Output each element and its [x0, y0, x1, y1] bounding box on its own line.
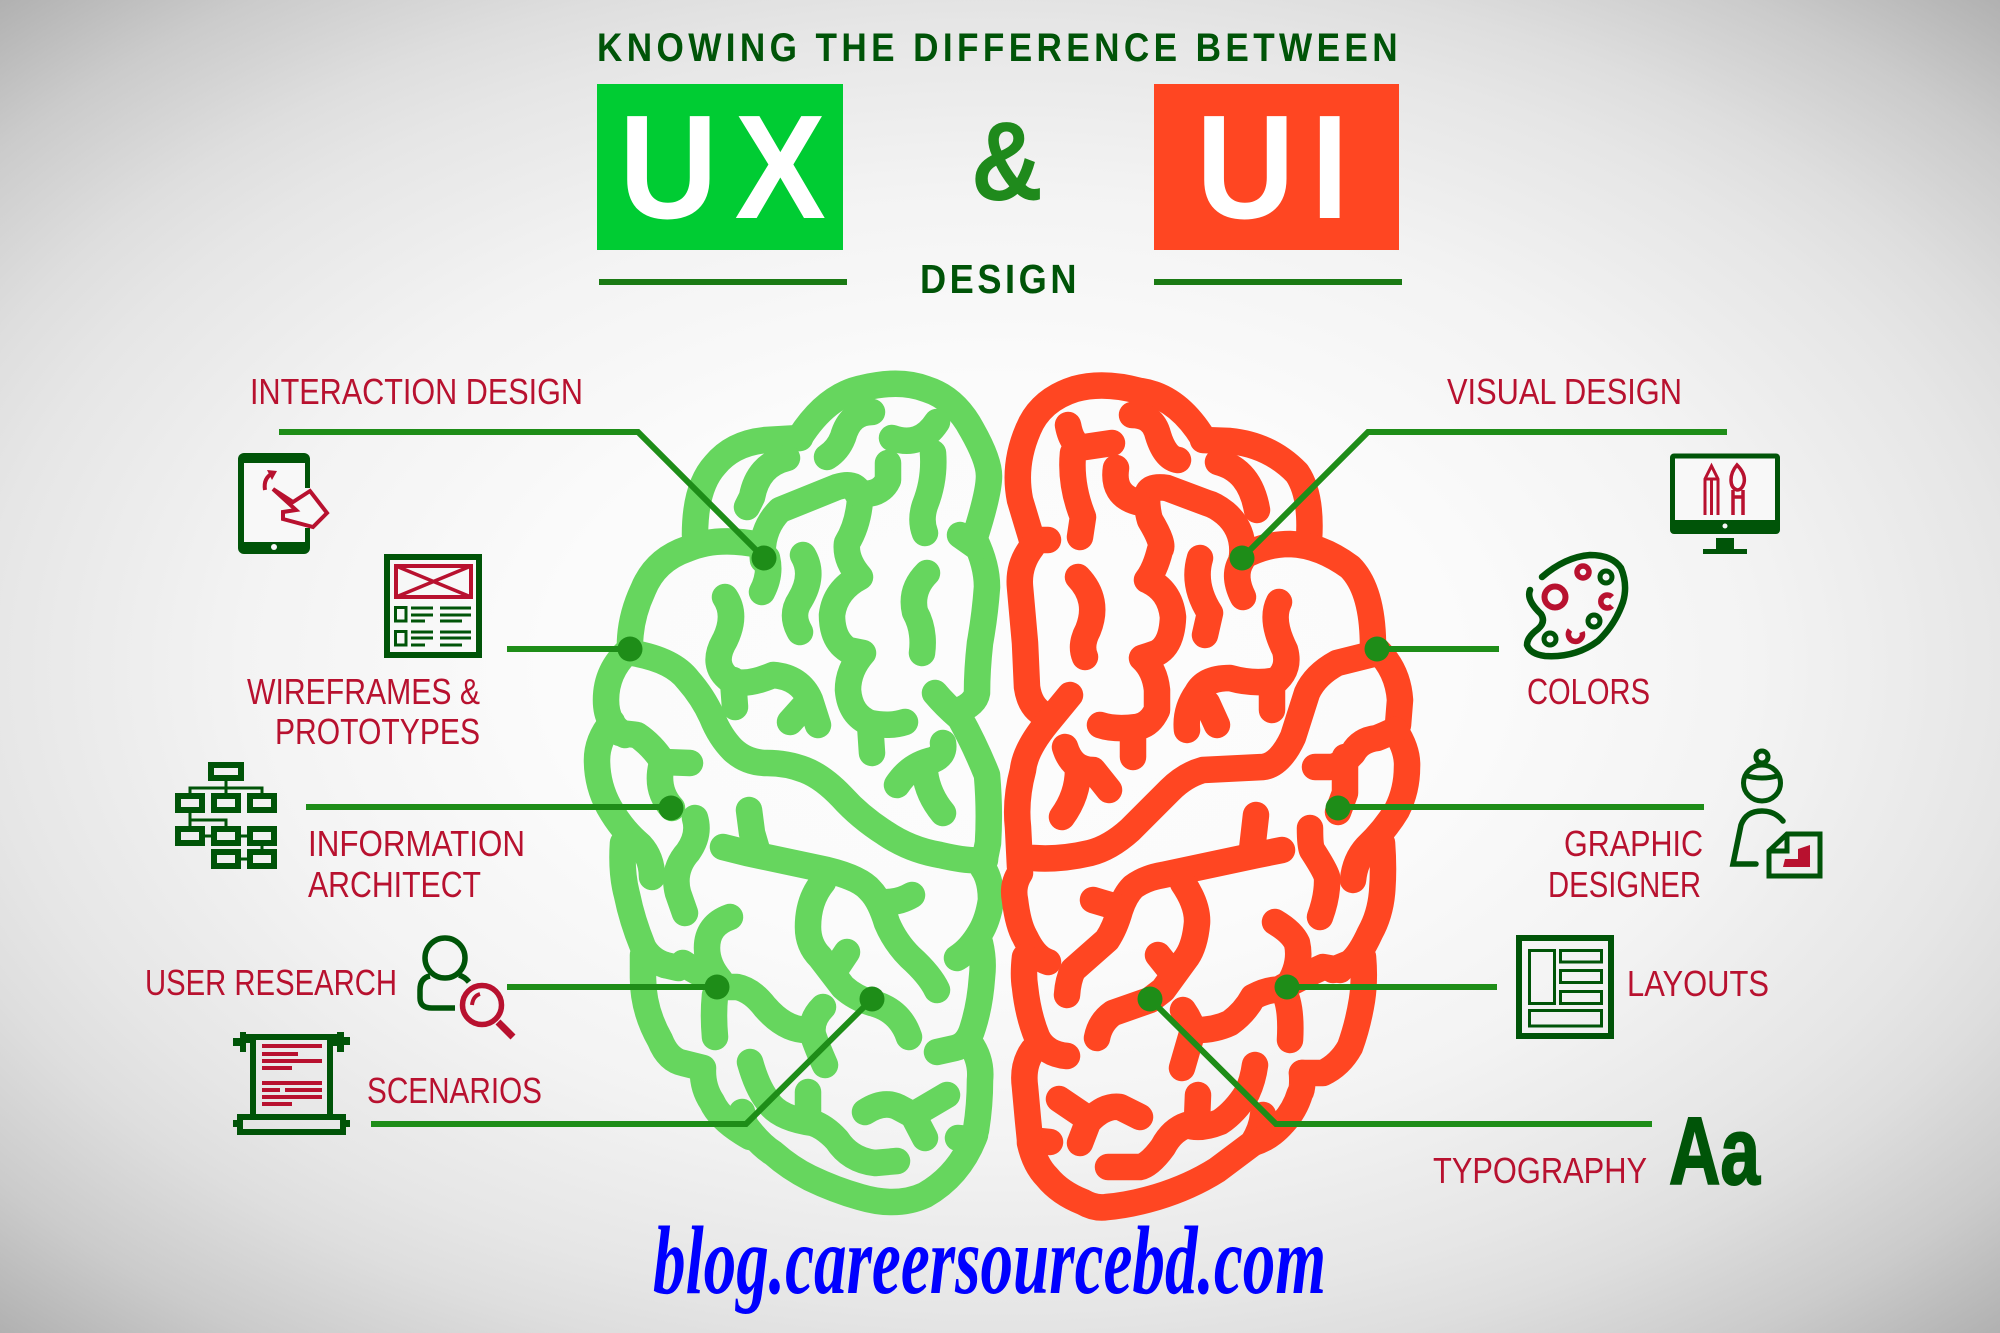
title: KNOWING THE DIFFERENCE BETWEEN	[597, 26, 1402, 70]
left underline	[599, 279, 847, 285]
brain: UI red hemisphere	[1014, 385, 1407, 1207]
UI badge	[1154, 84, 1399, 250]
icon: tablet with touch gesture	[238, 453, 327, 554]
connector: colors	[1364, 636, 1499, 662]
connector: user research	[507, 974, 730, 1000]
label: wireframes and prototypes: WIREFRAMES &	[247, 671, 480, 712]
label: wireframes and prototypes: PROTOTYPES	[275, 711, 480, 752]
label: colors: COLORS	[1527, 671, 1650, 712]
icon: wireframe page	[387, 557, 479, 655]
connector: visual design	[1230, 432, 1727, 570]
icon: page layout	[1519, 938, 1611, 1036]
icon: Aa glyphs: Aa	[1669, 1098, 1760, 1205]
header block	[597, 26, 1402, 302]
connector lines and dots	[279, 432, 1727, 1124]
design subtitle: DESIGN	[920, 256, 1080, 302]
label: information architect: ARCHITECT	[308, 864, 481, 905]
connector: information architect	[306, 796, 684, 820]
UX badge: UX	[619, 85, 826, 250]
label: graphic designer	[1548, 823, 1703, 905]
connector: graphic designer	[1326, 796, 1704, 820]
label: scenarios: SCENARIOS	[367, 1070, 542, 1111]
connector: typography	[1138, 986, 1652, 1124]
connector: interaction design	[279, 432, 776, 570]
label: information architect: INFORMATION	[308, 823, 525, 864]
icon: monitor with pencil and brush	[1670, 454, 1780, 554]
icon: color palette	[1527, 555, 1625, 656]
label: layouts: LAYOUTS	[1627, 963, 1769, 1004]
UI badge: UI	[1196, 85, 1349, 250]
connector: scenarios	[371, 986, 884, 1124]
icon: graphic designer	[1733, 751, 1820, 876]
website url: blog.careersourcebd.com	[653, 1207, 1326, 1315]
right underline	[1154, 279, 1402, 285]
label: visual design: VISUAL DESIGN	[1447, 371, 1682, 412]
label: graphic designer: GRAPHIC	[1564, 823, 1703, 864]
label: information architect	[308, 823, 525, 905]
label: graphic designer: DESIGNER	[1548, 864, 1701, 905]
label: user research: USER RESEARCH	[145, 962, 397, 1003]
icon: sitemap	[178, 765, 274, 866]
icon: user with magnifier	[420, 938, 513, 1037]
icon: scroll document	[233, 1032, 350, 1132]
connector: layouts	[1274, 974, 1497, 1000]
brain: UX green hemisphere	[597, 384, 991, 1202]
ampersand: &	[971, 99, 1043, 224]
connector: wireframes	[507, 636, 642, 662]
label: typography: TYPOGRAPHY	[1433, 1150, 1647, 1191]
label: interaction design: INTERACTION DESIGN	[250, 371, 583, 412]
label: wireframes and prototypes	[247, 671, 480, 752]
